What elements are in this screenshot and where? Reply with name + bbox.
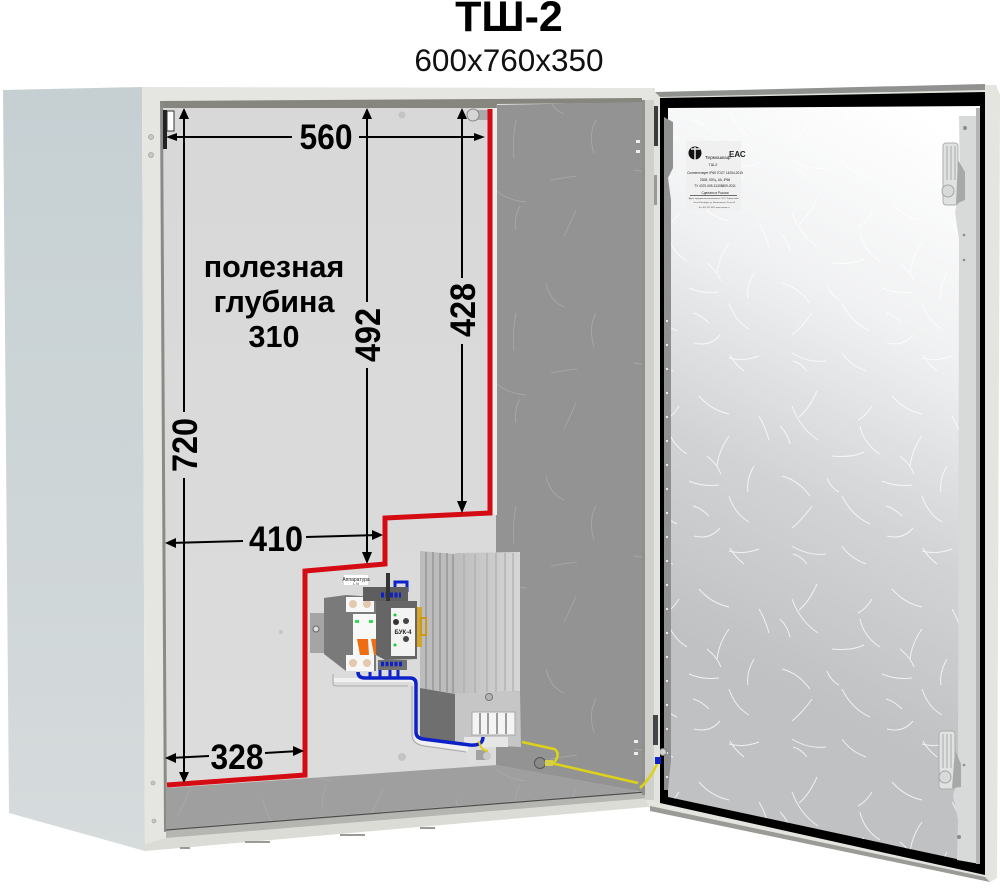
nameplate spec lines	[687, 171, 743, 195]
relay name: БУК-4	[395, 630, 412, 636]
yellow heater lead	[479, 741, 488, 751]
wall fibre texture	[496, 102, 642, 792]
blue breaker loops	[370, 670, 398, 678]
din rail detail	[313, 617, 335, 649]
dimension: 428	[444, 108, 483, 513]
floor front edge	[166, 791, 650, 838]
dimension: 428: 428	[444, 283, 483, 337]
heater terminals	[464, 712, 515, 747]
left inner edge	[160, 101, 167, 832]
heater base	[420, 688, 455, 744]
white wire	[334, 680, 468, 749]
label: usable depth	[204, 250, 344, 354]
cabinet body	[3, 87, 660, 851]
nameplate brand: Термошкаф	[705, 155, 731, 160]
back mounting plate	[162, 103, 497, 788]
nameplate conformity mark: ЕАС	[729, 150, 746, 159]
label: apparatus: L N	[353, 582, 359, 586]
floor	[166, 765, 642, 830]
frame fixing points	[148, 134, 156, 823]
dimension: 560	[166, 118, 485, 157]
door outer frame	[646, 85, 1000, 882]
cabinet side wall	[3, 87, 145, 851]
feet	[180, 827, 435, 849]
bottom terminals	[346, 655, 374, 671]
nameplate spec lines: ТУ 4370-005-31308809-2011	[694, 184, 736, 188]
dimension: 720: 720	[166, 418, 205, 472]
dimension: 720	[166, 108, 205, 783]
right inner wall	[496, 102, 642, 792]
nameplate rule	[690, 194, 737, 197]
plate edge strip	[492, 108, 497, 515]
dimension: 410: 410	[249, 520, 303, 559]
dimension: 492	[349, 108, 388, 564]
top-left slot latch	[163, 110, 174, 149]
ground nut	[534, 758, 553, 768]
door hinge strip	[642, 100, 660, 802]
right door stiffener	[953, 116, 980, 864]
dimension: 410	[165, 520, 383, 559]
door bottom edge	[650, 806, 990, 882]
black gasket	[660, 92, 985, 875]
cabinet front frame	[142, 87, 660, 851]
nameplate spec lines: Соответствует ІР65 ГОСТ 14254-2015	[687, 171, 743, 175]
top inner edge	[162, 98, 642, 108]
red usable-area outline	[167, 109, 490, 785]
yellow din clip	[417, 607, 426, 647]
nameplate address: Тел: 812 327-3311 www.rusterm.ru	[698, 206, 730, 209]
left door stiffener	[664, 117, 673, 790]
label: apparatus: Аппаратура	[342, 577, 370, 583]
blue wire	[358, 672, 483, 745]
nameplate address: Адрес предприятия-изготовителя: ООО "Термостойка"	[689, 197, 740, 200]
relay body	[376, 601, 417, 660]
nameplate	[686, 141, 746, 210]
ground wire	[522, 742, 661, 788]
terminal dots top	[381, 592, 401, 598]
galvanized inner panel	[668, 106, 980, 864]
ground wire path	[522, 742, 658, 788]
wall fasteners	[634, 140, 640, 755]
relay faceplate	[391, 608, 415, 656]
breaker front	[353, 614, 382, 655]
nameplate spec lines: 230В, 50Гц, 6А, IP66	[700, 178, 730, 182]
white wire outline	[333, 674, 466, 752]
blue connector	[655, 757, 661, 764]
blue loop	[395, 582, 407, 592]
top terminals	[346, 597, 374, 612]
floor texture	[166, 765, 642, 830]
dimension: 328	[165, 738, 304, 777]
dimension arrows	[165, 108, 485, 783]
earth bolt	[468, 748, 491, 764]
stiffener shade	[976, 108, 980, 864]
dimension: 560: 560	[300, 118, 352, 157]
top lock handle	[942, 143, 965, 205]
equipment: circuit breaker	[310, 575, 383, 671]
fibre texture	[668, 106, 980, 864]
nameplate model: ТШ-2	[709, 163, 717, 167]
nameplate spec lines: Сделано в России	[702, 191, 729, 195]
label: usable depth: полезная	[204, 250, 344, 284]
terminal dots bottom	[381, 662, 402, 666]
label: usable depth: 310	[249, 320, 299, 354]
label: usable depth: глубина	[214, 285, 335, 319]
nameplate address	[689, 197, 740, 209]
door	[642, 84, 1000, 882]
din rail bracket	[310, 613, 337, 653]
bottom lock handle	[939, 731, 961, 789]
equipment: control relay БУК-4	[363, 573, 426, 670]
heater fins	[420, 551, 455, 694]
subtitle: dimensions: 600х760х350	[414, 42, 604, 78]
dimension: 492: 492	[349, 308, 388, 362]
frame bottom lip	[143, 798, 655, 851]
door top edge	[655, 84, 985, 97]
relay top block	[363, 587, 408, 601]
equipment: wires	[333, 582, 488, 752]
stiffener dots	[666, 320, 668, 790]
plate mounting holes	[279, 112, 406, 761]
breaker body	[324, 595, 376, 671]
relay knobs and leds	[393, 614, 409, 646]
fin grooves	[426, 552, 513, 693]
nameplate address: Санкт-Петербург, ул. Малиновская, 26 лит. А	[693, 201, 735, 204]
relay bottom block	[378, 660, 407, 670]
heater screw	[486, 694, 492, 700]
nameplate logo	[688, 146, 702, 160]
equipment: heater	[420, 551, 521, 764]
earth stud	[660, 748, 666, 756]
antenna	[386, 573, 390, 607]
dimension: 328: 328	[210, 738, 264, 777]
stiffener holes	[957, 126, 967, 839]
label: apparatus	[342, 575, 370, 586]
orange toggles	[357, 639, 383, 655]
top-right bolt	[467, 109, 488, 121]
indicators	[355, 620, 373, 623]
